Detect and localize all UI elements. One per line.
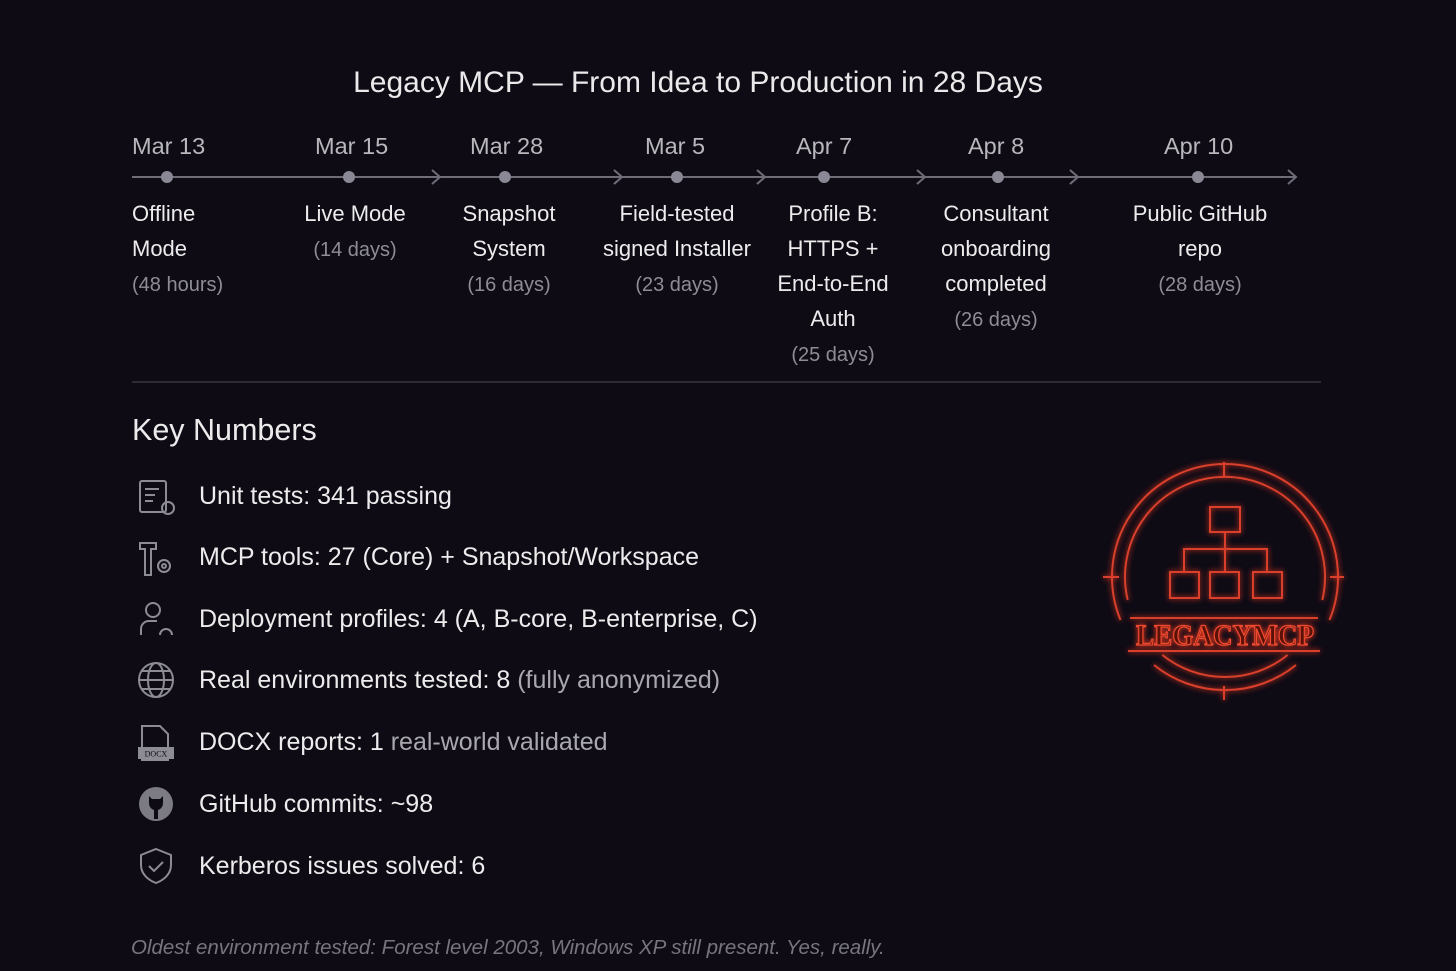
text: Mar 15 bbox=[315, 133, 388, 159]
dates: Mar 13 bbox=[132, 133, 205, 159]
milestone: live mode: Live Mode bbox=[304, 201, 406, 226]
logo text: LEGACYMCP bbox=[1136, 619, 1314, 652]
timeline bbox=[132, 169, 1298, 185]
milestone: github: (28 days) bbox=[1158, 274, 1242, 296]
milestone: offline mode: (48 hours) bbox=[132, 274, 223, 296]
text: Apr 7 bbox=[796, 133, 852, 159]
milestone: consultant: completed bbox=[945, 271, 1047, 296]
item: environments: Real environments tested: 8 (fully anonymized) bbox=[199, 666, 720, 694]
icon: github bbox=[139, 787, 173, 821]
milestone: profile b: Auth bbox=[810, 306, 856, 331]
milestone: profile b: (25 days) bbox=[791, 344, 875, 366]
footer note: Oldest environment tested: Forest level 2003, Windows XP still present. Yes, really. bbox=[131, 936, 885, 959]
milestone: installer bbox=[603, 201, 751, 296]
icon: shield bbox=[140, 848, 172, 884]
item: github: GitHub commits: ~98 bbox=[199, 790, 433, 818]
milestone: github bbox=[1133, 201, 1267, 296]
milestone: consultant: Consultant bbox=[943, 201, 1049, 226]
title: Legacy MCP — From Idea to Production in 28 Days bbox=[353, 66, 1043, 99]
milestone: snapshot: System bbox=[472, 236, 546, 261]
item: kerberos: Kerberos issues solved: 6 bbox=[199, 852, 485, 880]
milestone: installer: signed Installer bbox=[603, 236, 751, 261]
icon: tools bbox=[139, 542, 171, 576]
milestone: consultant: (26 days) bbox=[954, 309, 1038, 331]
icon: profiles bbox=[140, 602, 173, 635]
milestone: snapshot: (16 days) bbox=[467, 274, 551, 296]
milestone: profile b: HTTPS + bbox=[787, 236, 879, 261]
timeline axis bbox=[132, 169, 1298, 185]
icon: tests bbox=[139, 480, 175, 515]
logo bbox=[1100, 458, 1347, 703]
item: profiles: Deployment profiles: 4 (A, B-core, B-enterprise, C) bbox=[199, 605, 758, 633]
milestone: consultant: onboarding bbox=[941, 236, 1051, 261]
milestone: offline mode: Mode bbox=[132, 236, 187, 261]
icon: globe bbox=[138, 662, 174, 698]
milestone: live mode bbox=[304, 201, 406, 261]
milestone: live mode: (14 days) bbox=[313, 239, 397, 261]
milestone: offline mode bbox=[132, 201, 223, 296]
milestone: consultant bbox=[941, 201, 1051, 331]
text: Mar 28 bbox=[470, 133, 543, 159]
text: Apr 8 bbox=[968, 133, 1024, 159]
milestone: offline mode: Offline bbox=[132, 201, 195, 226]
milestone: profile b: End-to-End bbox=[777, 271, 889, 296]
heading: key numbers: Key Numbers bbox=[132, 413, 317, 447]
milestone: github: repo bbox=[1178, 236, 1222, 261]
milestone: profile b bbox=[777, 201, 889, 366]
icon: docx bbox=[138, 725, 174, 761]
item: docx: DOCX reports: 1 real-world validated bbox=[199, 728, 608, 756]
icon: docx: DOCX bbox=[145, 750, 168, 758]
milestone: profile b: Profile B: bbox=[788, 201, 878, 226]
item: tools: MCP tools: 27 (Core) + Snapshot/Workspace bbox=[199, 543, 699, 571]
text: Mar 5 bbox=[645, 133, 705, 159]
milestone: installer: Field-tested bbox=[620, 201, 734, 226]
milestone: snapshot: Snapshot bbox=[463, 201, 555, 226]
item: tests: Unit tests: 341 passing bbox=[199, 482, 452, 510]
milestone: github: Public GitHub bbox=[1133, 201, 1267, 226]
milestone: snapshot bbox=[463, 201, 556, 296]
text: Apr 10 bbox=[1164, 133, 1233, 159]
milestone: installer: (23 days) bbox=[635, 274, 719, 296]
